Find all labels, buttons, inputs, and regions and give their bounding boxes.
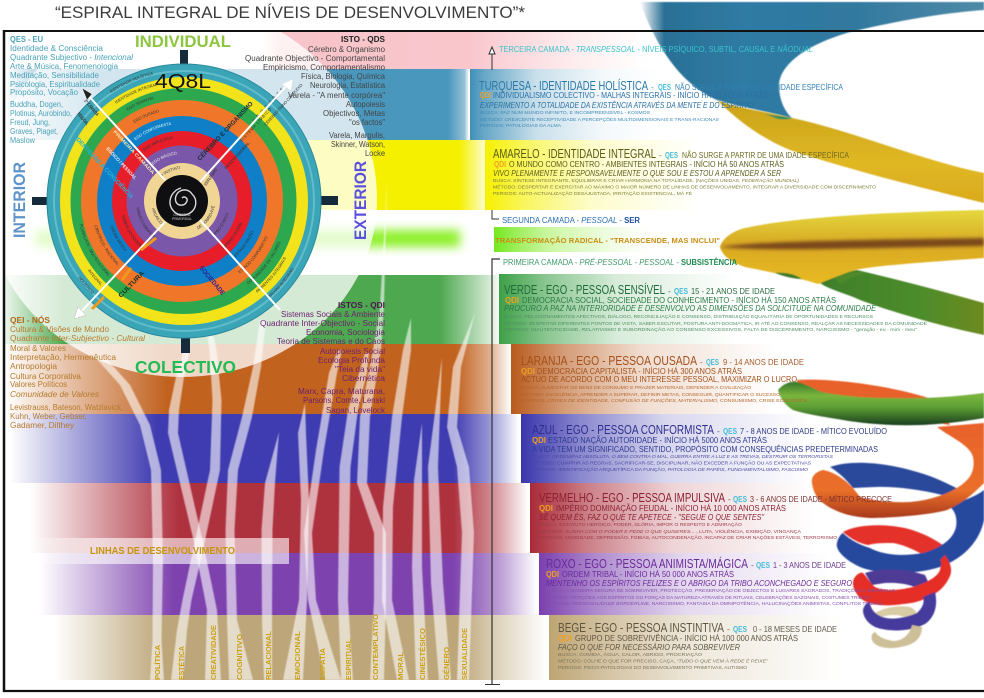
level: amarelo: QDI — [494, 160, 506, 169]
level: bege: - — [727, 624, 730, 634]
banner: linhas de desenvolvimento: LINHAS DE DESENVOLVIMENTO — [90, 546, 235, 557]
level: vermelho: SÊ QUEM ÉS, FAZ O QUE TE APETECE - "SEGUE O QUE SENTES" — [539, 513, 765, 522]
quadrant text: QEI - NOS: Valores Políticos — [10, 380, 67, 389]
ring labels: CIENTÍFICO - RACIONAL — [94, 225, 118, 266]
level: laranja: DEMOCRACIA CAPITALISTA - INÍCIO HÁ 300 ANOS ATRÁS — [537, 367, 742, 376]
level: bege: QDI — [558, 634, 572, 643]
level: vermelho: PERIGOS: ANSIEDADE, DEPRESSÃO, FOBIAS, AUTOCONDENAÇÃO, INCAPAZ DE CRIAR NAÇÕES ESTÁVEIS, TERRORISMO — [539, 534, 837, 541]
level: turquesa — [479, 78, 843, 129]
ring labels: EGO IMPULSIVO — [142, 136, 173, 152]
level: vermelho: MÉTODO: ALINHA COM O PODER E PEDE O QUE QUISERES... , LUTA, VIOLÊNCIA, EXIBIÇÃO, VINGANÇA — [539, 527, 802, 535]
ring labels: CÉREBRO TRINO COMPLEXO — [263, 82, 304, 127]
level: roxo: - — [751, 560, 754, 570]
quadrant text: ISTOS - QDI: Sagan, Lovelock — [326, 406, 386, 415]
quadrant text: QES - EU: Buddha, Dogen, — [10, 100, 63, 109]
level: roxo: MENTENHO OS ESPÍRITOS FELIZES E O ABRIGO DA TRIBO ACONCHEGADO E SEGURO — [546, 579, 852, 588]
quadrant text: QES - EU: Meditação, Sensibilidade — [10, 71, 100, 80]
tier axis arrow and brackets — [485, 47, 500, 685]
level: verde: QES — [674, 286, 688, 296]
heading: exterior: EXTERIOR — [351, 161, 370, 240]
level: laranja: MÉTODO: EXCELÊNCIA, APRENDER A SUPERAR, DEFINIR METAS, CONSEGUIR, QUANTIFICAR O SUCESSO — [521, 390, 780, 398]
heading: 4Q8L: 4Q8L — [155, 71, 211, 93]
tier label: primeira camada: PRIMEIRA CAMADA - PRÉ-PESSOAL - PESSOAL - SUBSISTÊNCIA — [503, 258, 737, 267]
axis labels along arrows: IDENTIDADE & CONSCIÊNCIA — [74, 135, 136, 201]
axis labels along arrows: PESSOAL — [76, 111, 90, 126]
quadrant text: ISTO - QDS: Varela - "A mente corpórea" — [288, 91, 385, 100]
level: amarelo: AMARELO - IDENTIDADE INTEGRAL — [493, 147, 656, 161]
level: vermelho: QES — [733, 494, 747, 504]
level: laranja: QDI — [521, 367, 535, 376]
axis labels along arrows: CÉREBRO E ORGANISMO — [195, 99, 255, 162]
quadrant text: ISTO - QDS: "os factos" — [349, 118, 385, 127]
quadrant text: ISTOS - QDI: Marx, Capra, Maturana, — [298, 387, 385, 396]
level: amarelo: - — [659, 150, 662, 160]
quadrant text: ISTO - QDS: Skinner, Watson, — [331, 140, 385, 149]
level: azul: PERIGOS: IDENTIFICAÇÃO ARQUETÍPICA DA FUNÇÃO, PATOLOGIA DE PAPÉIS, FUNDAMENTALISMO, FASCISMO — [532, 466, 808, 473]
level: verde: 15 - 21 ANOS DE IDADE — [691, 286, 775, 296]
level: verde: PROCURO A PAZ NA INTERIORIDADE E DESENVOLVO AS DIMENSÕES DA SOLICITUDE NA COMUNIDADE — [504, 304, 877, 313]
quadrant text: QES - EU: Arte & Música, Fenomenologia — [10, 62, 119, 71]
ring labels: EGO MÁGICO — [152, 152, 177, 165]
level: turquesa: MÉTODO: CRESCENTE RECEPTIVIDADE A PERCEPÇÕES MULTIDIMENSIONAIS E TRANS-RACIONAS — [480, 116, 720, 123]
ring labels: EGO SENSÍVEL — [126, 96, 154, 110]
axis labels along arrows: SOCIEDADE — [197, 265, 226, 297]
line labels: SEXUALIDADE — [460, 628, 469, 680]
level: roxo: MÉTODO: PETIÇÕES AOS ESPÍRITOS OU FORÇAS DA NATUREZA ATRAVÉS DE RITUAIS, CELEBRAÇÕES SAZONAIS, COSTUMES TRIBAIS — [546, 594, 871, 601]
quadrant text: QES - EU: Quadrante Subjectivo - Intencional — [10, 53, 133, 62]
ring labels: IMPÉRIO FEUDAL — [222, 222, 242, 250]
quadrant text: ISTOS - QDI: Ecologia Profunda — [318, 356, 386, 365]
centre spiral: DIRECTRIZ — [174, 213, 191, 217]
title: “ESPIRAL INTEGRAL DE NÍVEIS DE DESENVOLVIMENTO”* — [55, 3, 526, 22]
ring labels: TRIBO ÉTNICA — [212, 214, 228, 235]
quadrant text: ISTOS - QDI — [260, 301, 386, 415]
ring labels: IDENTIDADE INTEGRAL — [114, 83, 158, 104]
heading: interior: INTERIOR — [10, 162, 29, 238]
level: azul: QES — [723, 426, 737, 436]
tier label: segunda camada: SEGUNDA CAMADA - PESSOAL - SER — [502, 216, 640, 225]
quadrant text: QES - EU: Propósito, Vocação — [10, 88, 79, 97]
level: laranja: PERIGOS: CRISES DE IDENTIDADE, CONFUSÃO DE FUNÇÕES, MATERIALISMO , CONSUMISMO, CRISE ECOLÓGICA — [521, 397, 808, 404]
level: amarelo: PERIGOS: AUTO-ACTUALIZAÇÃO DESAJUSTADA, IRRITAÇÃO EXISTENCIAL, MÁ FÉ — [493, 190, 693, 197]
level: turquesa: QDI — [480, 91, 491, 100]
ring labels: EGO OUSADO — [133, 110, 159, 123]
ring labels: PLURALISTA - MULTICULTURAL — [80, 224, 110, 276]
level: bege: BUSCA: COMIDA, ÁGUA, CALOR, ABRIGO, PROCRIAÇÃO — [558, 651, 702, 658]
level text blocks backgrounds — [470, 69, 842, 680]
quadrant text: QES - EU: Psicologia, Espiritualidade — [10, 80, 101, 89]
ring labels: MÁGICO ANIMISTA — [136, 208, 155, 238]
level: verde — [504, 282, 928, 333]
line labels: ESTÉTICA — [177, 646, 186, 680]
quadrant text: ISTOS - QDI: Economia, Sociologia — [306, 328, 386, 337]
level: azul: BUSCA: ORDEM/PAZ ABSOLUTA, O BEM CONTRA O MAL, GUERRA ENTRE A LUZ E AS TREVAS, DESTRUIR OS TERRORISTAS — [532, 454, 834, 460]
level: roxo: ORDEM TRIBAL - INÍCIO HÁ 50 000 ANOS ATRÁS — [562, 570, 734, 579]
level: vermelho: BUSCA: ESTATUTO HERÓICO, PODER, GLÓRIA, IMPOR O RESPEITO E ADMIRAÇÃO — [539, 521, 742, 528]
level: turquesa: - — [651, 82, 654, 92]
quadrant text: QEI - NOS: Antropologia — [10, 362, 58, 371]
level: bege: 0 - 18 MESES DE IDADE — [753, 624, 837, 634]
level: vermelho: QDI — [539, 504, 553, 513]
ring labels: MALHAS INTEGRAIS — [269, 268, 294, 298]
spiral dynamics 3D ribbon — [717, 100, 984, 648]
level: roxo: 1 - 3 ANOS DE IDADE — [773, 560, 846, 570]
quadrant text: QES - EU: Identidade & Consciência — [10, 44, 104, 53]
ring labels: EGO CONFORMISTA — [134, 122, 172, 140]
level: verde: PERIGOS: INAUTENTICIDADE, RELATIVISMO E SUBORDINAÇÃO AO CONSENSO EXCESSIVOS, FALTA DE DISCERNIMENTO, NARCISISMO - "geração - eu - mim - meu" — [504, 326, 917, 333]
line labels: CONTEMPLATIVO — [371, 614, 380, 680]
quadrant text: QEI - NOS: Gadamer, Dilthey — [10, 421, 74, 430]
quadrant text: ISTO - QDS: Cérebro & Organismo — [308, 45, 386, 54]
ring labels — [78, 72, 304, 298]
left level bands — [5, 32, 650, 680]
level: amarelo: NÃO SURGE A PARTIR DE UMA IDADE ESPECÍFICA — [682, 150, 849, 160]
ring labels: ARCAICO — [152, 208, 162, 224]
level: amarelo — [493, 147, 876, 197]
level: turquesa: TURQUESA - IDENTIDADE HOLÍSTICA — [479, 78, 648, 93]
callout: transformacao radical: TRANSFORMAÇÃO RADICAL - "TRANSCENDE, MAS INCLUI" — [495, 236, 720, 245]
quadrant text: QEI - NOS: Levistrauss, Bateson, Watzlavick, — [10, 403, 123, 412]
level: azul: A VIDA TEM UM SIGNIFICADO, SENTIDO, PROPÓSITO COM CONSEQUÊNCIAS PREDETERMINADAS — [532, 445, 878, 454]
level: azul: MÉTODO: CUMPRIR AS REGRAS, SACRIFICAR-SE, DISCIPLINAR, NÃO EXCEDER A FUNÇÃO OU AS EXPECTATIVAS — [532, 460, 812, 466]
level: azul — [532, 423, 887, 473]
line labels: COGNITIVO — [235, 634, 244, 680]
quadrant text: ISTOS - QDI: Autopoiesis Social — [320, 347, 385, 356]
level: verde: MÉTODO: RESPEITAR DIFERENTES PONTOS DE VISTA, SABER ESCUTAR, POSTURA ANTI-DOGMÁTICA, IR ATÉ AO CONSENSO, REALÇAR AS NECESSIDADES DA COMUNIDADE — [504, 320, 928, 327]
line labels: RELACIONAL — [264, 631, 273, 680]
level: bege: BEGE - EGO - PESSOA INSTINTIVA — [558, 621, 725, 635]
quadrant text: ISTOS - QDI: Sistemas Sociais & Ambiente — [281, 310, 386, 319]
level: vermelho — [539, 491, 892, 541]
quadrant text: QEI - NOS — [10, 316, 145, 430]
level: verde: QDI — [505, 296, 519, 305]
ring labels: INTEGRAL — [88, 269, 102, 286]
quadrant text: ISTO - QDS: Quadrante Objectivo - Comportamental — [245, 54, 385, 63]
line labels: EMOCIONAL — [293, 631, 302, 680]
level: turquesa: QES — [658, 82, 671, 92]
level: laranja: QES — [706, 357, 719, 367]
axis ticks around circle — [32, 50, 338, 353]
quadrant text: ISTOS - QDI: Quadrante Inter-Objectivo - Social — [260, 319, 385, 328]
quadrant text: ISTOS - QDI: "Teia da vida" — [335, 365, 385, 374]
ring labels: TRONCO CEREBRAL — [223, 140, 251, 171]
level: laranja: BUSCA: AUMENTAR OS BENS DE CONSUMO E PRAZER MATERIAIS, DEFENDER A CIVILIZAÇÃO — [521, 384, 751, 391]
ring labels: ESTADO CORPORATIVO — [238, 236, 268, 274]
level: verde: BUSCA: RELACIONAMENTOS AFECTIVOS, DIÁLOGO, RECONCILIAÇÃO E CONSENSO, DISTRIBUIÇÃO EQUALITÁRIA DE OPORTUNIDADES E RECURSOS — [504, 313, 874, 320]
level: roxo: QES — [756, 560, 770, 570]
quadrant text: QES - EU: QES - EU — [10, 35, 43, 44]
heading: colectivo: COLECTIVO — [135, 357, 236, 377]
ring labels: ESTADO NAÇÃO — [234, 230, 254, 257]
line labels: MORAL — [396, 652, 405, 680]
ring labels: CLÃ DE SOBREVIVÊNCIA — [196, 206, 215, 230]
level: turquesa: EXPERIMENTO A TOTALIDADE DA EXISTÊNCIA ATRAVÉS DA MENTE E DO ESPÍRITO — [480, 101, 753, 110]
axis labels along arrows — [74, 98, 255, 299]
level: amarelo: VIVO PLENAMENTE E RESPONSAVELMENTE O QUE SOU E ESTOU A APRENDER A SER — [493, 169, 781, 178]
level: bege: FAÇO O QUE FOR NECESSÁRIO PARA SOBREVIVER — [558, 643, 740, 652]
line labels: POLÍTICA — [153, 644, 162, 680]
level: laranja: LARANJA - EGO - PESSOA OUSADA — [521, 354, 698, 368]
quadrant text: ISTO - QDS: Objectivos, Metas — [323, 109, 385, 118]
level: roxo: BUSCA: A MANEIRA SEGURA DE SOBREVIVER, PROTECÇÃO, PRESERVAÇÃO DE OBJECTOS E LUGARES SAGRADOS, TRADIÇÕES E MEMÓRIAS — [546, 587, 896, 594]
line labels: CINESTÉSICO — [418, 628, 427, 680]
quadrant text: QES - EU: Freud, Jung, — [10, 118, 50, 127]
quadrant text: ISTO - QDS: Empiricismo, Comportamentalismo — [263, 63, 386, 72]
heading: individual: INDIVIDUAL — [135, 32, 231, 51]
ring labels: IDENTIDADE HOLÍSTICA — [110, 72, 154, 93]
quadrant text: QEI - NOS: Kuhn, Weber, Gebser, — [10, 412, 87, 421]
quadrant text: QEI - NOS: Interpretação, Hermenêutica — [10, 353, 117, 362]
quadrant text: ISTOS - QDI: Cibernética — [342, 374, 386, 383]
line labels — [153, 614, 469, 680]
level: amarelo: BUSCA: SÍNTESE INTEGRANTE, EQUILIBRAR E CRIAR HARMONIA NA TOTALIDADE, (NAÇÕES UNIDAS, FEDERAÇÃO MUNDIAL) — [493, 177, 799, 184]
line labels: ESPIRITUAL — [344, 639, 353, 680]
level: laranja: 9 - 14 ANOS DE IDADE — [723, 357, 804, 367]
axis labels along arrows: PRIMEIRA CAMADA — [112, 129, 156, 176]
line labels: GÉNERO — [442, 647, 451, 680]
spiral: turquoise top behind frame — [640, 2, 984, 118]
centre spiral — [170, 188, 196, 221]
level: roxo — [546, 556, 896, 607]
axis labels along arrows: CULTURA — [117, 270, 146, 299]
ring labels: ORDEM MÍTICA — [110, 226, 126, 252]
level: bege: GRUPO DE SOBREVIVÊNCIA - INÍCIO HÁ 100 000 ANOS ATRÁS — [575, 634, 798, 643]
white quadrant halo circle — [0, 5, 377, 377]
level: bege: QES — [733, 624, 747, 634]
quadrant text: ISTOS - QDI: Parsons, Comte, Lenski — [303, 396, 385, 405]
level: bege: MÉTODO: COLHE O QUE FOR PRECISO, CAÇA, "TUDO O QUE VEM À REDE É PEIXE" — [558, 658, 768, 664]
quadrant text: QEI - NOS: Cultura & Visões de Mundo — [10, 325, 110, 334]
lines of development streams — [95, 181, 475, 680]
level: turquesa: NÃO SURGE A PARTIR DE UMA IDADE ESPECÍFICA — [675, 82, 843, 92]
level: vermelho: IMPÉRIO DOMINAÇÃO FEUDAL - INÍCIO HÁ 10 000 ANOS ATRÁS — [556, 504, 786, 513]
line labels: EMPATIA — [318, 648, 327, 680]
line labels: CREATIVIDADE — [209, 625, 218, 680]
centre spiral: PRIMORDIAL — [172, 217, 192, 221]
quadrant text: QEI - NOS: Moral & Valores — [10, 344, 66, 353]
quadrant text: ISTO - QDS: Locke — [365, 149, 386, 158]
quadrant text: QEI - NOS: Quadrante Inter-Subjectivo - Cultural — [10, 334, 145, 343]
ring labels: ESTRUTURAS — [203, 167, 218, 187]
level: laranja: - — [700, 357, 703, 367]
ring labels: COMUNIDADE DE VALORES — [247, 242, 280, 284]
level: vermelho: VERMELHO - EGO - PESSOA IMPULSIVA — [539, 491, 726, 505]
ring labels: NEOCÓRTEX — [251, 82, 288, 123]
level: azul: - — [717, 426, 720, 436]
axis tags on arrows — [92, 238, 156, 309]
quadrant text: QEI - NOS: Comunidade de Valores — [10, 390, 99, 399]
quadrant text: ISTO - QDS: ISTO - QDS — [341, 35, 386, 44]
quadrant text: QES - EU: Plotinus, Aurobindo, — [10, 109, 72, 118]
level: verde: DEMOCRACIA SOCIAL, SOCIEDADE DO CONHECIMENTO - INÍCIO HÁ 150 ANOS ATRÁS — [522, 296, 836, 305]
level: roxo: QDI — [546, 570, 559, 579]
quadrant text: ISTO - QDS: Física, Biologia, Química — [301, 72, 386, 81]
level: laranja: ACTUO DE ACORDO COM O MEU INTERESSE PESSOAL, MAXIMIZAR O LUCRO — [521, 375, 797, 384]
quadrant text: ISTO - QDS — [245, 35, 386, 158]
level: azul: 7 - 8 ANOS DE IDADE - MÍTICO EVOLUÍDO — [740, 426, 887, 436]
ring labels: HOLÍSTICO — [78, 276, 94, 294]
quadrant text: ISTOS - QDI: ISTOS - QDI — [338, 301, 385, 310]
diagonal quadrant arrows — [74, 79, 293, 319]
level: verde: - — [668, 286, 671, 296]
axis labels along arrows: EGÓICO / PESSOAL — [105, 145, 139, 181]
banner: linhas de desenvolvimento — [12, 538, 289, 564]
quadrant text: QES - EU — [10, 35, 133, 145]
quadrant text: QEI - NOS: Cultura Corporativa — [10, 372, 82, 381]
level: roxo: PERIGOS: PERSONALIDADE BORDERLINE, NARCISISMO, FANTASIA DA OMNIPOTÊNCIA, HALUCINAÇÕES ANIMISTAS, CONFLITOS TRIBAIS — [546, 599, 883, 607]
quadrant text: ISTO - QDS: Neurologia, Estatística — [310, 81, 386, 90]
level: amarelo: QES — [665, 150, 678, 160]
level: azul: ESTADO NAÇÃO AUTORIDADE - INÍCIO HÁ 5000 ANOS ATRÁS — [548, 436, 767, 445]
level: azul: QDI — [532, 436, 546, 445]
ring labels: AMBIENTES INTEGRAIS — [256, 257, 286, 293]
level: amarelo: MÉTODO: DESPERTAR E EXERCITAR AO MÁXIMO O MAIOR NÚMERO DE LINHAS DE DESENVOLVIMENTO, INTEGRAR A DIVERSIDADE COM DISCERNIMENTO — [493, 184, 876, 190]
level: verde: VERDE - EGO - PESSOA SENSÍVEL — [504, 282, 665, 297]
level: vermelho: 3 - 6 ANOS DE IDADE - MÍTICO PRECOCE — [750, 494, 892, 504]
quadrant text: ISTO - QDS: Autopoiesis — [346, 100, 385, 109]
level: turquesa: PERIGOS: PATOLOGIAS DA ALMA — [480, 123, 562, 129]
level: laranja — [521, 354, 808, 404]
level: azul: AZUL - EGO - PESSOA CONFORMISTA — [532, 423, 715, 437]
four quadrants eight levels circle — [46, 64, 322, 338]
quadrant text: QEI - NOS: QEI - NÓS — [10, 316, 51, 325]
level: vermelho: - — [728, 494, 731, 504]
quadrant text: QES - EU: Maslow — [10, 136, 35, 145]
quadrant text: ISTO - QDS: Varela, Margulis, — [329, 131, 385, 140]
level: amarelo: O MUNDO COMO CENTRO - AMBIENTES INTEGRAIS - INÍCIO HÁ 50 ANOS ATRÁS — [509, 160, 784, 169]
quadrant text: QES - EU: Graves, Piaget, — [10, 127, 58, 136]
tier label: terceira camada: TERCEIRA CAMADA - TRANSPESSOAL - NÍVEIS PSÍQUICO, SUBTIL, CAUSAL E NÃODUAL — [499, 44, 813, 54]
level: bege: PERIGOS: PSICO-PATOLOGIAS DO DESENVOLVIMENTO PRIMITIVAS, AUTISMO — [558, 665, 747, 671]
ring labels: SISTEMA LÍMBICO — [239, 107, 272, 143]
ring labels: TRIBOS DO PODER — [122, 214, 142, 247]
level: roxo: ROXO - EGO - PESSOA ANIMISTA/MÁGICA — [546, 556, 749, 571]
level: bege — [558, 621, 837, 671]
axis labels along arrows: 2ª CAMADA — [83, 98, 100, 117]
quadrant text: ISTOS - QDI: Teoria de Sistemas e do Caos — [277, 337, 385, 346]
level: turquesa: BUSCA: PAZ NUM MUNDO INFINITO, E INCOMPREENSÍVEL - KOSMOS — [480, 109, 651, 116]
level: turquesa: INDIVIDUALISMO COLECTIVO - MALHAS INTEGRAIS - INÍCIO HÁ 30 ANOS ATRÁS — [493, 91, 768, 100]
